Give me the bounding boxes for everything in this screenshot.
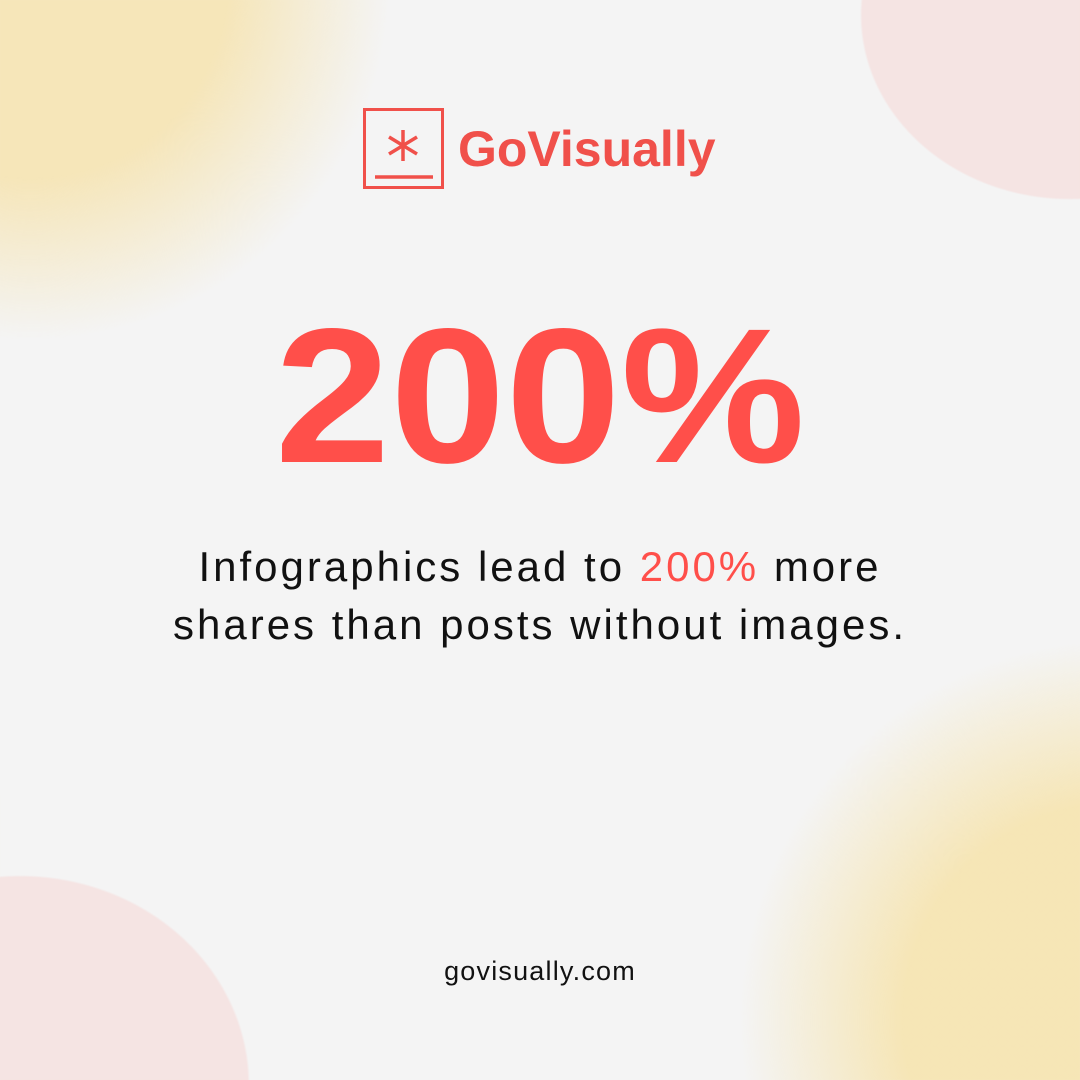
big stat: 200% — [275, 288, 805, 503]
description: shares than posts without images. — [173, 601, 907, 648]
description: Infographics lead to 200% more — [198, 543, 882, 590]
footer url: govisually.com — [444, 956, 636, 986]
logo wordmark: GoVisually — [458, 121, 716, 177]
description — [173, 543, 907, 648]
logo — [363, 108, 716, 189]
icon: logo box — [363, 108, 444, 189]
